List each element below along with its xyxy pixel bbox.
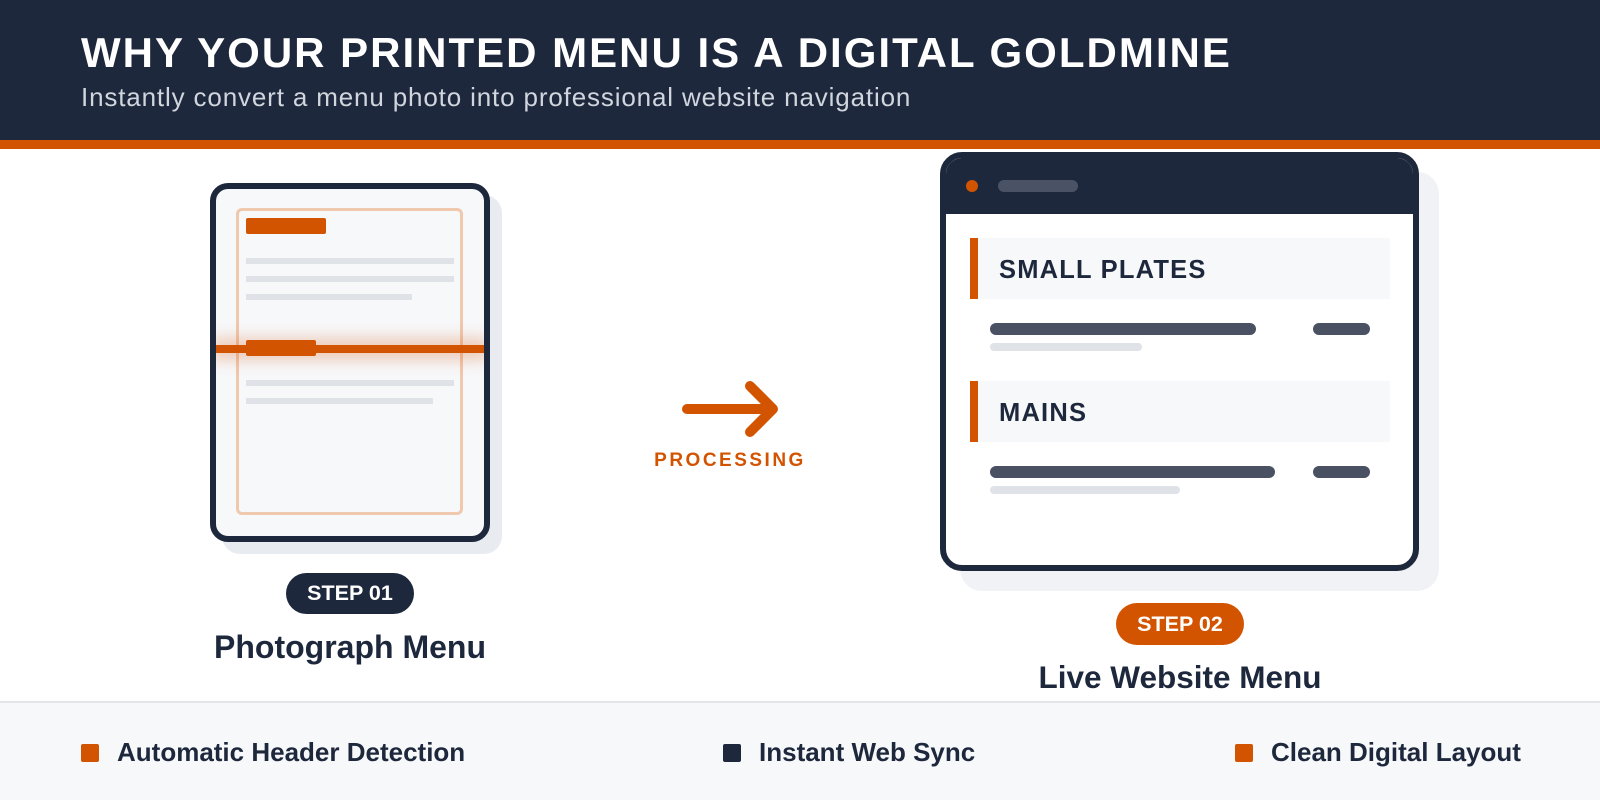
arrow [682, 381, 778, 437]
browser bar [946, 158, 1413, 214]
feature: clean layout: Clean Digital Layout [1271, 737, 1521, 767]
step 01 badge: STEP 01 [307, 581, 393, 605]
subtitle: Instantly convert a menu photo into professional website navigation [81, 82, 911, 112]
processing label: PROCESSING [654, 450, 806, 471]
section: small plates: SMALL PLATES [999, 256, 1207, 284]
panel: photographed menu phone [210, 183, 502, 554]
feature: web sync: Instant Web Sync [759, 737, 975, 767]
title: WHY YOUR PRINTED MENU IS A DIGITAL GOLDMINE [81, 29, 1232, 76]
feature: header detection: Automatic Header Detection [117, 737, 465, 767]
section: mains: MAINS [999, 399, 1087, 427]
section: small plates [970, 238, 1390, 299]
step 01 label: Photograph Menu [214, 629, 486, 665]
header [0, 0, 1600, 140]
footer features [0, 701, 1600, 800]
step 02 badge: STEP 02 [1137, 612, 1223, 636]
section: mains [970, 381, 1390, 442]
panel: live website browser [940, 152, 1439, 591]
step 02 label: Live Website Menu [1038, 659, 1321, 695]
scan line [216, 345, 484, 353]
step 01 badge [286, 573, 414, 614]
paper menu [236, 208, 463, 515]
step 02 badge [1116, 603, 1244, 645]
